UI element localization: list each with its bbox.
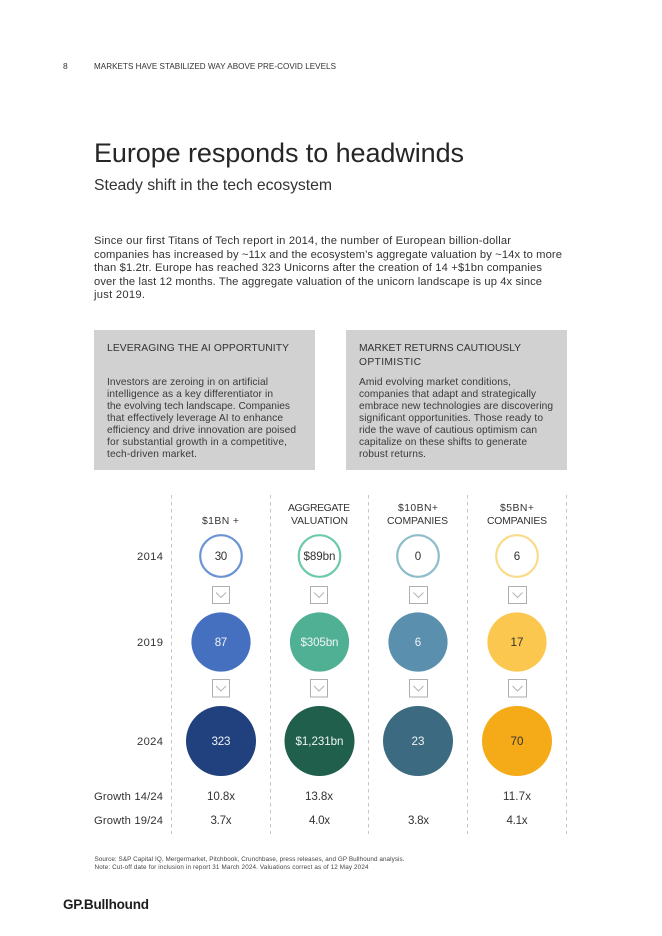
row labels: 2024 — [137, 736, 163, 748]
intro paragraph: companies has increased by ~11x and the ecosystem’s aggregate valuation by ~14x to more — [94, 249, 562, 261]
2024 circle: 1bn: 323 — [212, 735, 230, 748]
subtitle: Steady shift in the tech ecosystem — [94, 177, 332, 194]
panel body text: the evolving tech landscape. Companies — [107, 401, 290, 412]
column headers — [202, 503, 547, 527]
growth 14/24 values: 10.8x — [207, 790, 235, 803]
panel body text: for substantial growth in a competitive, — [107, 437, 287, 448]
panel body text: efficiency and drive innovation are poised — [107, 425, 296, 436]
source note — [94, 856, 405, 871]
panel body text: companies that adapt and strategically — [359, 389, 537, 400]
arrows 2019 to 2024 — [212, 680, 526, 697]
panel body text: Amid evolving market conditions, — [359, 377, 511, 388]
2024 circle: 10bn — [383, 706, 453, 776]
2014 circle: 5bn: 6 — [514, 550, 520, 563]
2014 circle: valuation: $89bn — [304, 550, 336, 563]
2014 circle: 10bn — [397, 535, 439, 577]
intro paragraph: Since our first Titans of Tech report in 2014, the number of European billion-dollar — [94, 235, 511, 247]
panel body text: tech-driven market. — [107, 449, 197, 460]
growth 19/24 values: 3.8x — [408, 814, 429, 827]
logo: GP.Bullhound — [63, 897, 149, 912]
panel: market returns cautiously optimistic — [346, 330, 567, 470]
intro paragraph: just 2019. — [93, 289, 145, 301]
growth 14/24 values: 11.7x — [503, 790, 531, 803]
2024 circle: 5bn: 70 — [510, 735, 524, 748]
2024 circle: 10bn: 23 — [412, 735, 424, 748]
intro paragraph — [93, 235, 562, 301]
page number: 8 — [63, 61, 68, 71]
growth 19/24 values: 3.7x — [210, 814, 232, 827]
growth 19/24 values — [210, 814, 528, 827]
column headers: $1BN + — [202, 516, 239, 527]
panel heading — [359, 343, 521, 368]
arrows 2014 to 2019 — [212, 586, 526, 604]
column headers: COMPANIES — [487, 516, 547, 527]
2014 circle: 1bn: 30 — [215, 550, 227, 563]
growth 19/24 values: 4.1x — [506, 814, 528, 827]
panel body text: that effectively leverage AI to enhance — [107, 413, 283, 424]
2019 circle: valuation — [290, 612, 349, 672]
panel body text — [359, 377, 553, 460]
row labels: Growth 19/24 — [94, 815, 163, 827]
column headers: COMPANIES — [387, 516, 448, 527]
panel heading: LEVERAGING THE AI OPPORTUNITY — [107, 343, 289, 354]
column headers: $10BN+ — [398, 503, 438, 514]
growth 14/24 values — [207, 790, 531, 803]
2019 circle: valuation: $305bn — [300, 636, 338, 649]
intro paragraph: than $1.2tr. Europe has reached 323 Unicorns after the creation of 14 +$1bn companies — [94, 262, 542, 274]
2024 circle: 1bn — [186, 706, 256, 776]
panel heading: OPTIMISTIC — [359, 357, 422, 368]
2019 circle: 10bn: 6 — [415, 636, 421, 649]
panel body text: ride the wave of cautious optimism can — [359, 425, 537, 436]
2019 circle: 5bn — [487, 612, 547, 672]
panel: leveraging the AI opportunity — [94, 330, 315, 470]
row labels — [94, 551, 163, 827]
source note: Note: Cut-off date for inclusion in report 31 March 2024. Valuations correct as of 12 May 2024 — [94, 864, 369, 871]
2019 circle: 5bn: 17 — [510, 636, 524, 649]
panel body text: robust returns. — [359, 449, 426, 460]
2014 circle: valuation — [299, 535, 340, 577]
panel body text: intelligence as a key differentiator in — [107, 389, 273, 400]
2024 circle: valuation — [284, 706, 354, 776]
row labels: 2019 — [137, 637, 163, 649]
intro paragraph: over the last 12 months. The aggregate valuation of the unicorn landscape is up 4x since — [94, 276, 542, 288]
column headers: AGGREGATE — [288, 503, 350, 514]
section header: MARKETS HAVE STABILIZED WAY ABOVE PRE-COVID LEVELS — [94, 62, 337, 71]
growth 14/24 values: 13.8x — [305, 790, 333, 803]
row labels: Growth 14/24 — [94, 791, 163, 803]
2024 circle: valuation: $1,231bn — [296, 735, 344, 748]
growth 19/24 values: 4.0x — [309, 814, 330, 827]
panel body text: embrace new technologies are discovering — [359, 401, 553, 412]
panel heading: MARKET RETURNS CAUTIOUSLY — [359, 343, 521, 354]
2019 circle: 10bn — [388, 612, 448, 672]
panel body text: capitalize on these shifts to generate — [359, 437, 527, 448]
title: Europe responds to headwinds — [94, 138, 464, 168]
panel body text — [107, 377, 296, 460]
column headers: VALUATION — [291, 516, 348, 527]
panel body text: Investors are zeroing in on artificial — [107, 377, 268, 388]
2014 circle: 5bn — [496, 535, 538, 577]
2014 circle: 1bn — [200, 535, 242, 577]
2019 circle: 1bn — [191, 612, 251, 672]
2019 circle: 1bn: 87 — [215, 636, 227, 649]
row labels: 2014 — [137, 551, 163, 563]
column headers: $5BN+ — [500, 503, 534, 514]
source note: Source: S&P Capital IQ, Mergermarket, Pitchbook, Crunchbase, press releases, and GP Bullhound analysis. — [94, 856, 405, 863]
2014 circle: 10bn: 0 — [415, 550, 421, 563]
panel body text: significant opportunities. Those ready to — [359, 413, 543, 424]
2024 circle: 5bn — [482, 706, 552, 776]
